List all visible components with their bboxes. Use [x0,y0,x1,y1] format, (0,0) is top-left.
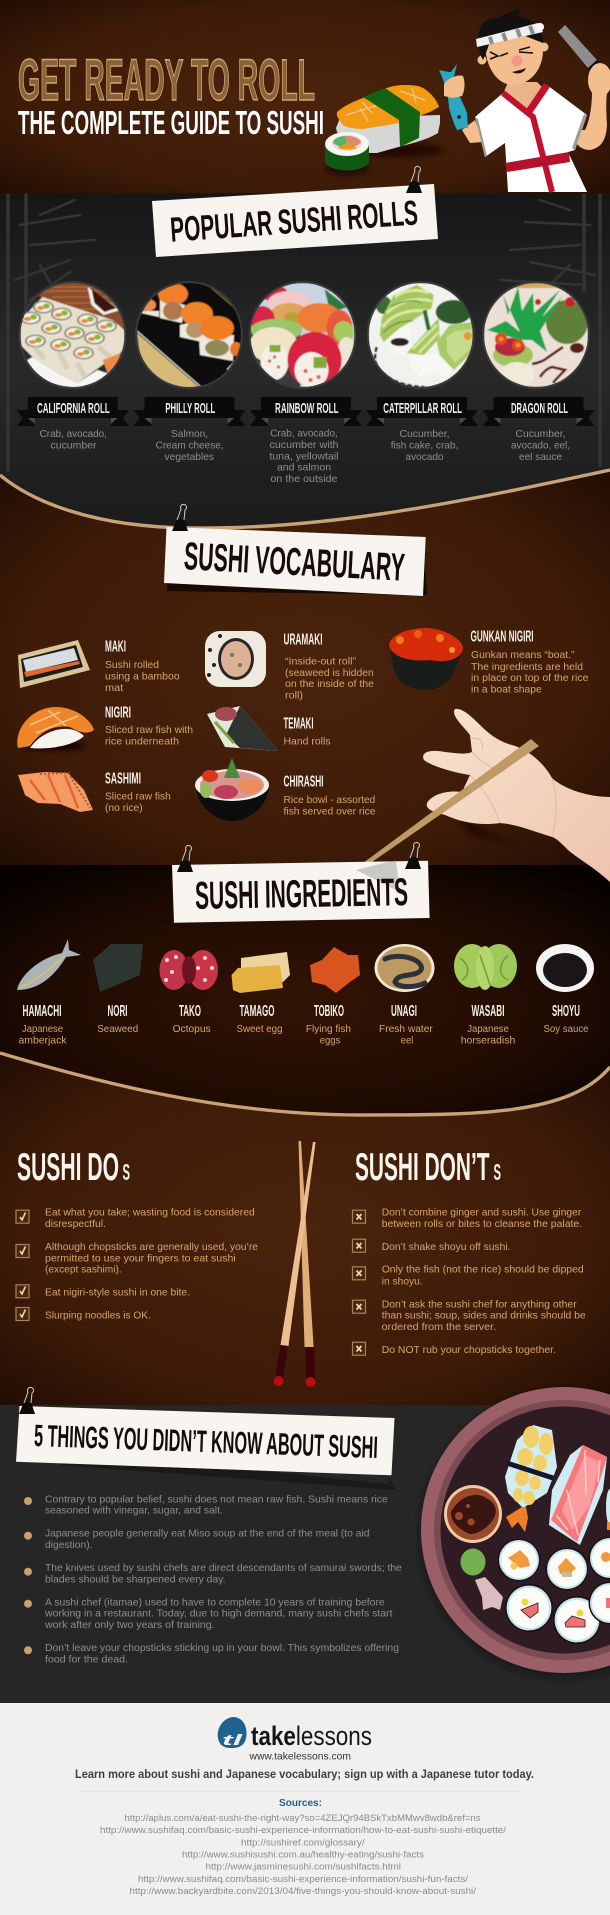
term: uramaki: (seaweed is hidden [285,667,374,679]
heading: sushi donts [355,1146,501,1189]
right arm [574,92,607,150]
panel: sushi vocabulary [0,470,610,865]
ingredient: tobiko: eggs [320,1034,340,1046]
term: uramaki [205,631,374,702]
list: five facts: work after only two years of training. [44,1619,215,1631]
ingredient: tamago: Sweet egg [236,1023,283,1035]
heading: sushi donts: SUSHI DON’T [355,1146,490,1189]
panel: sushi donts [352,1146,586,1356]
left forearm [462,120,483,143]
ingredient: tobiko: Flying fish [306,1023,351,1035]
ingredient: tobiko: TOBIKO [314,1003,344,1020]
photo: dragon roll [482,281,590,389]
term: gunkan nigiri: Gunkan means “boat.” [471,649,575,661]
term: temaki [207,706,330,751]
title [18,48,324,142]
image: chirashi bowl [195,758,269,821]
list: donts: ordered from the server. [382,1321,496,1333]
ingredient: tobiko [306,947,360,1046]
bamboo decoration right [500,195,600,465]
caption: rainbow roll: tuna, yellowtail [270,451,338,462]
checkboxes [16,1210,29,1320]
headband [476,23,543,47]
sources list: http://www.sushisushi.com.au/healthy-eating/sushi-facts [182,1850,425,1860]
image: gunkan with roe [389,628,463,690]
ribbon: philly roll [134,397,246,426]
heading: sushi dos: SUSHI DO [17,1146,119,1189]
list: five facts: food for the dead. [45,1653,128,1665]
list: five facts: Japanese people generally eat Miso soup at the end of the meal (to aid [45,1528,370,1540]
term: uramaki: roll) [285,690,303,702]
list: five facts: blades should be sharpened every day. [45,1573,226,1585]
term: temaki: Hand rolls [284,736,330,748]
list: donts: between rolls or bites to cleanse the palate. [382,1218,582,1230]
list: five facts: digestion). [45,1539,92,1551]
illustration: sushi plate [419,1387,610,1679]
ingredient: hamachi: amberjack [18,1034,67,1046]
ingredient: shoyu: SHOYU [552,1003,580,1020]
caption: caterpillar roll: avocado [406,452,444,463]
list: dos: (except sashimi). [45,1264,122,1276]
sources list [100,1813,507,1896]
ribbon: rainbow roll [250,397,362,426]
ingredient: unagi [374,944,434,1046]
list: dos: Although chopsticks are generally used, you’re [45,1241,258,1253]
ingredient: shoyu: Soy sauce [544,1023,589,1035]
caption: dragon roll: eel sauce [519,452,562,463]
ingredient: unagi: UNAGI [391,1003,417,1020]
bamboo decoration left [8,195,95,470]
brown area below curve [0,1053,610,1405]
ingredient: hamachi: HAMACHI [22,1003,62,1020]
x boxes [352,1210,366,1355]
ingredient: wasabi: WASABI [472,1003,504,1020]
ribbon: rainbow roll: RAINBOW ROLL [275,400,338,417]
logo: takelessons [218,1717,372,1751]
section background [0,1405,610,1703]
caption: dragon roll: avocado, eel, [511,440,570,452]
term: gunkan nigiri: The ingredients are held [471,661,583,673]
term: uramaki: on the inside of the [285,678,374,690]
caption: dragon roll: Cucumber, [516,429,566,440]
footer background [0,1703,610,1915]
sources list: http://www.sushifaq.com/basic-sushi-experience-information/sushi-fun-facts/ [138,1874,469,1884]
image: uramaki roll [205,631,266,687]
panel: footer [0,1703,610,1915]
sources list: http://www.sushifaq.com/basic-sushi-experience-information/how-to-eat-sushi-sushi-etiquette/ [100,1825,507,1835]
term: maki: mat [105,682,123,694]
ingredient: nori: Seaweed [97,1023,138,1035]
hand with chopstick [355,709,610,882]
caption: philly roll: Salmon, [171,429,208,440]
image: sashimi slices [18,772,93,812]
caption: philly roll [156,429,224,463]
term: nigiri: NIGIRI [105,704,131,721]
ingredient: wasabi [454,944,517,1046]
term: maki: Sushi rolled [105,659,159,671]
sources list: http://aplus.com/a/eat-sushi-the-right-way?so=4ZEJQr94BSkTxbMMwv8wdb&ref=ns [124,1813,481,1823]
caption: caterpillar roll: Cucumber, [400,429,450,440]
list: dos [45,1207,258,1322]
panel: popular sushi rolls [0,193,610,528]
ingredient: nori: NORI [108,1003,128,1020]
section background [0,865,610,1115]
panel: five things [0,1387,610,1703]
caption: california roll [40,429,107,452]
ingredient: tamago [232,952,290,1035]
ribbon: caterpillar roll: CATERPILLAR ROLL [383,400,462,417]
list: five facts: Contrary to popular belief, sushi does not mean raw fish. Sushi means rice [45,1493,388,1505]
term: maki: using a bamboo [105,670,180,682]
panel: sushi dos: S [122,1159,130,1185]
list: dos: permitted to use your fingers to eat sushi [45,1252,236,1264]
caption: rainbow roll: on the outside [270,474,338,485]
caption: caterpillar roll [391,429,458,463]
list: five facts: seasoned with vinegar, sugar, and salt. [45,1505,223,1517]
sushi ingredients banner: SUSHI INGREDIENTS [195,871,408,918]
term: chirashi [195,758,376,821]
section background [0,193,610,528]
wasabi [460,1548,486,1576]
neck [503,82,545,110]
caption: philly roll: Cream cheese, [156,440,224,452]
list: donts [382,1207,586,1356]
icon: sushi chef [439,8,610,192]
ingredient: unagi: eel [401,1034,413,1046]
photo: caterpillar roll [367,281,475,389]
list: donts: Don’t combine ginger and sushi. Use ginger [382,1207,582,1219]
ingredient: hamachi: Japanese [22,1023,63,1035]
eyes and mouth [490,47,533,59]
term: nigiri [17,704,193,750]
image: salmon nigiri [17,707,94,750]
sushi rolls [498,1489,610,1644]
heading: sushi dos [17,1146,130,1189]
list: five facts: working in a restaurant. Today, due to high demand, many sushi chefs start [44,1608,393,1620]
sushi vocabulary banner [164,504,427,596]
ingredient: hamachi [17,939,81,1046]
term: maki [18,639,180,694]
website: www.takelessons.com [249,1750,351,1762]
list: donts: Don’t shake shoyu off sushi. [382,1241,510,1253]
term: chirashi: CHIRASHI [284,774,324,791]
ribbon: dragon roll [482,397,594,426]
term: gunkan nigiri [389,628,589,696]
popular sushi rolls banner [152,166,438,257]
title line 1: GET READY TO ROLL [18,48,315,113]
ginger [475,1577,503,1610]
hair [479,8,543,60]
ribbon: california roll: CALIFORNIA ROLL [37,400,110,417]
logo: takelessons: takelessons [251,1721,372,1751]
image: maki on bamboo mat [18,640,90,688]
term: maki: MAKI [105,639,126,656]
ingredient: tamago: TAMAGO [240,1003,274,1020]
ingredient: tako [160,950,218,1035]
photo: rainbow roll [248,281,356,390]
list: donts: than sushi; soup, sides and drinks should be [382,1310,586,1322]
popular sushi rolls banner: POPULAR SUSHI ROLLS [169,193,419,250]
list: donts: in shoyu. [382,1275,423,1287]
caption: rainbow roll [270,429,339,485]
ingredient: nori [93,944,143,1035]
list: donts: Only the fish (not the rice) should be dipped [382,1264,584,1276]
sources list: http://sushiref.com/glossary/ [241,1837,365,1847]
caption: caterpillar roll: fish cake, crab, [391,440,458,452]
image: temaki cone [207,706,278,751]
ingredient: shoyu [536,944,594,1035]
kimono [475,85,587,192]
panel: sushi dos [16,1146,258,1322]
photo: philly roll [135,281,243,389]
term: temaki: TEMAKI [284,715,314,732]
list: five facts: The knives used by sushi chefs are direct descendants of samurai swords; the [45,1562,402,1574]
term: uramaki: URAMAKI [284,631,322,648]
caption: dragon roll [511,429,570,463]
list: dos: Eat what you take; wasting food is considered [45,1207,255,1219]
term: gunkan nigiri: in a boat shape [471,684,542,696]
term: sashimi: (no rice) [105,802,143,814]
header background [0,0,610,196]
list: five facts [44,1493,402,1665]
term: sashimi: Sliced raw fish [105,790,171,802]
term: chirashi: Rice bowl - assorted [284,794,375,806]
call to action: Learn more about sushi and Japanese vocabulary; sign up with a Japanese tutor today. [75,1769,534,1781]
term: sashimi: SASHIMI [105,770,141,787]
curved divider [0,470,610,528]
shrimp sushi [505,1425,557,1532]
ingredient: wasabi: horseradish [461,1034,515,1046]
list: five facts: Don’t leave your chopsticks sticking up in your bowl. This symbolizes offering [45,1642,399,1654]
five things banner [16,1387,395,1490]
list: donts: Don’t ask the sushi chef for anything other [382,1298,577,1310]
caption: rainbow roll: cucumber with [270,440,339,451]
logo: takelessons: tl [222,1732,244,1749]
section background [0,470,610,865]
fish [439,64,468,130]
caption: california roll: cucumber [50,440,97,452]
panel: sushi donts: S [494,1159,501,1185]
sources heading: Sources: [279,1797,322,1809]
bullets [24,1497,32,1654]
caption: rainbow roll: Crab, avocado, [270,429,338,440]
hand with fish [444,75,465,98]
sushi vocabulary banner: SUSHI VOCABULARY [183,535,406,590]
sushi ingredients banner [172,842,430,923]
curved divider [0,1053,610,1115]
list: donts: Do NOT rub your chopsticks together. [382,1344,556,1356]
ribbon: california roll [17,397,129,426]
panel: sushi ingredients [0,709,610,1405]
term: sashimi [18,770,171,814]
illustration: chopsticks [274,1141,316,1387]
term: nigiri: rice underneath [105,736,179,748]
ingredient: tako: TAKO [179,1003,201,1020]
term: chirashi: fish served over rice [284,806,376,818]
knife [558,25,597,68]
caption: philly roll: vegetables [165,452,214,463]
tuna nigiri [549,1445,607,1545]
list: dos: Slurping noodles is OK. [45,1310,151,1322]
dipping bowl [444,1485,502,1543]
sources list: http://www.jasminesushi.com/sushifacts.html [206,1862,401,1872]
caption: rainbow roll: and salmon [277,463,331,474]
ribbon: philly roll: PHILLY ROLL [165,400,215,417]
term: uramaki: “Inside-out roll” [285,656,357,668]
photo: california roll [18,281,126,389]
caption: california roll: Crab, avocado, [40,429,107,440]
title line 2: THE COMPLETE GUIDE TO SUSHI [18,105,324,142]
list: dos: Eat nigiri-style sushi in one bite. [45,1287,190,1299]
icon: nigiri and roll [325,85,443,175]
ingredient: tako: Octopus [173,1023,211,1035]
sources list: http://www.backyardbite.com/2013/04/five-things-you-should-know-about-sushi/ [130,1886,477,1896]
term: gunkan nigiri: in place on top of the rice [471,672,589,684]
list: five facts: A sushi chef (itamae) used to have to complete 10 years of training before [45,1596,385,1608]
ingredient: unagi: Fresh water [379,1023,433,1035]
term: gunkan nigiri: GUNKAN NIGIRI [470,629,534,646]
ribbon: caterpillar roll [366,397,478,426]
face [478,56,486,64]
term: nigiri: Sliced raw fish with [105,724,193,736]
ingredient: wasabi: Japanese [467,1023,509,1035]
list: dos: disrespectful. [45,1218,106,1230]
